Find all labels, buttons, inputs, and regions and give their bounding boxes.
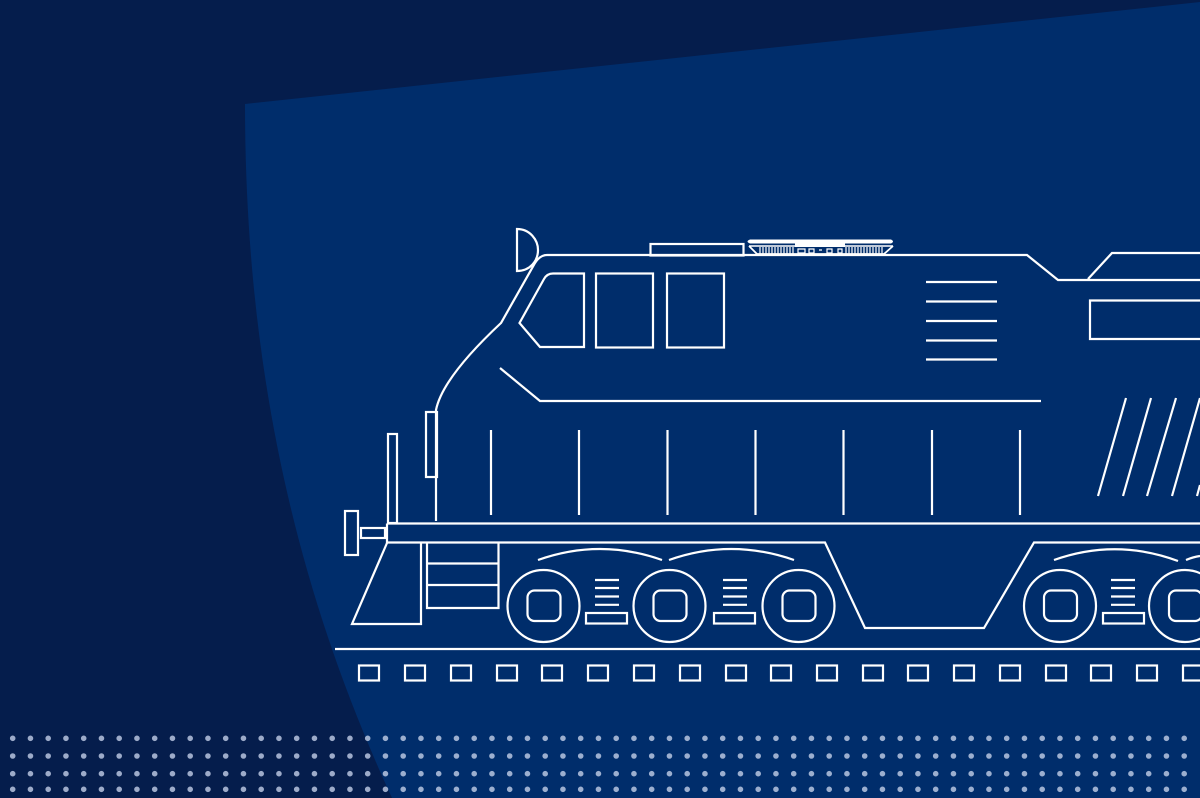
steps	[427, 543, 498, 608]
vent louvers	[926, 282, 997, 360]
headlight	[517, 229, 538, 271]
cab window rear	[667, 274, 724, 348]
spring set 1	[586, 580, 627, 624]
dot pattern band	[13, 738, 1200, 789]
spotlight panel	[245, 2, 1200, 798]
slanted grille	[1098, 398, 1200, 496]
coupler	[345, 511, 385, 555]
wheel 3	[762, 570, 834, 642]
rear hood panel	[1090, 300, 1200, 339]
rear hood top	[1088, 253, 1200, 279]
wheel arches	[538, 549, 1200, 561]
rail	[335, 648, 1200, 650]
deck and truck frame	[387, 524, 1200, 628]
cab window front	[520, 274, 584, 347]
spring set 2	[714, 580, 755, 624]
locomotive line drawing	[335, 229, 1200, 680]
cab window middle	[596, 274, 653, 348]
side panel lines	[491, 430, 1020, 515]
roof horn rack	[748, 240, 893, 254]
wheel 5	[1149, 570, 1200, 642]
front post	[388, 434, 397, 523]
locomotive body outline	[436, 255, 1200, 521]
roof box	[650, 244, 744, 256]
wheel 2	[634, 570, 706, 642]
spring set 3	[1103, 580, 1144, 624]
rail ties	[359, 666, 1200, 680]
front marker light	[426, 412, 437, 477]
body stripe	[500, 368, 1041, 401]
front pilot	[352, 543, 421, 624]
wheel 1	[508, 570, 580, 642]
wheel 4	[1024, 570, 1096, 642]
